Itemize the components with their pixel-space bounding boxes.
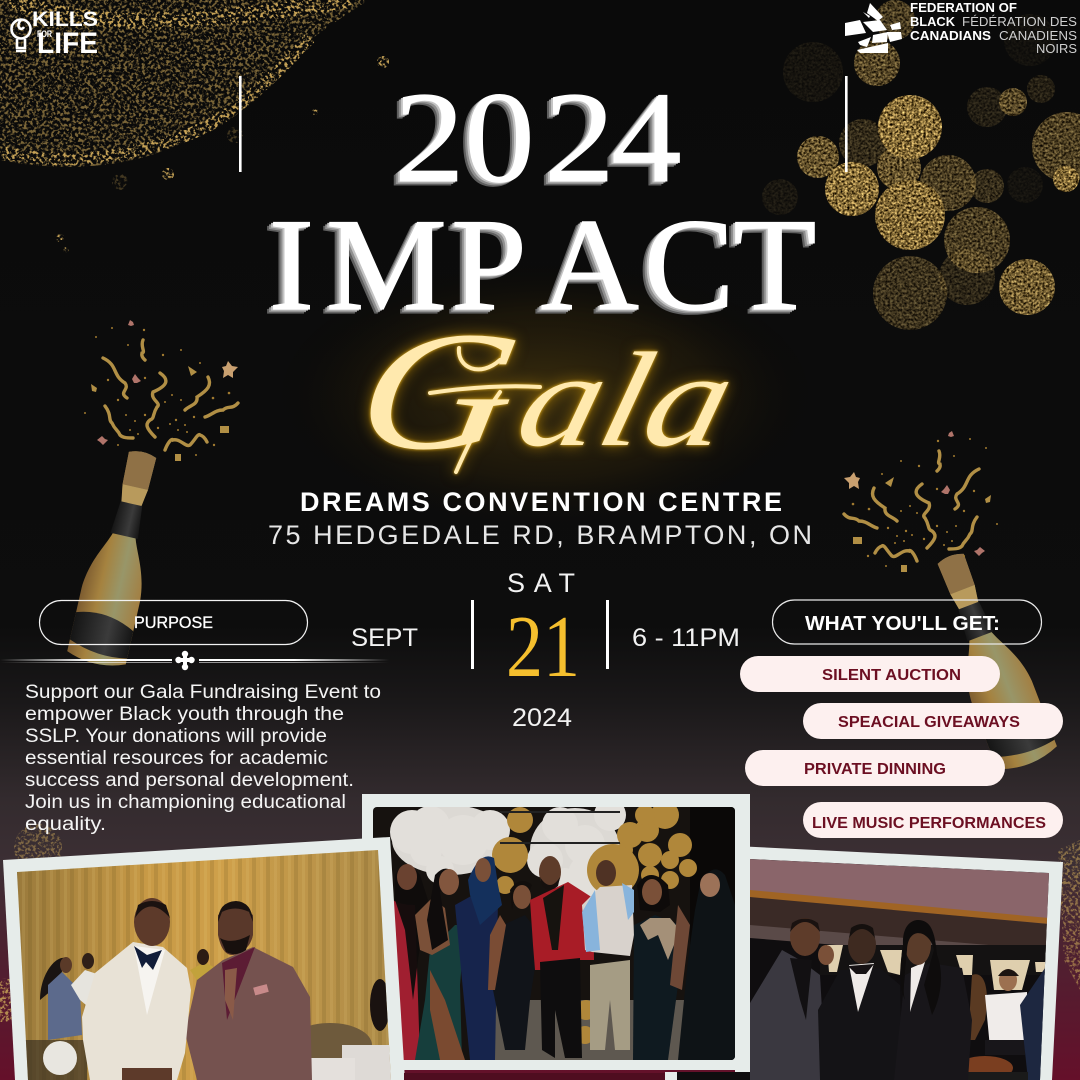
- weekday: SAT: [507, 568, 575, 598]
- date divider right: [606, 600, 609, 669]
- icon: light bulb: [12, 20, 30, 51]
- benefit pill: live music: [803, 802, 1063, 838]
- day number: 21: [506, 599, 580, 696]
- purpose description: SSLP. Your donations will provide: [25, 726, 327, 747]
- time: 6 - 11PM: [632, 624, 740, 652]
- benefit pill: special giveaways: [803, 703, 1063, 739]
- title frame rule left: [239, 76, 242, 172]
- title: IMPACT: IMPACT: [267, 193, 814, 339]
- logo: Federation of Black Canadians: CANADIENS: [999, 28, 1077, 43]
- photo: right group: [665, 846, 1063, 1080]
- logo: Federation of Black Canadians: FEDERATION OF: [910, 0, 1017, 15]
- purpose description: success and personal development.: [25, 770, 354, 791]
- benefit pill: silent auction: [740, 656, 1000, 692]
- left champagne bottle: [66, 445, 172, 670]
- purpose description: Support our Gala Fundraising Event to: [25, 682, 381, 703]
- purpose pill: [40, 600, 308, 644]
- logo: Skills for Life: [12, 8, 98, 60]
- title frame rule right: [845, 76, 848, 172]
- logo: Federation of Black Canadians: FÉDÉRATION DES: [962, 14, 1077, 29]
- title: 2024: 2024: [388, 70, 675, 214]
- purpose description: essential resources for academic: [25, 748, 328, 769]
- benefit pill: live music: LIVE MUSIC PERFORMANCES: [812, 815, 1046, 832]
- month: SEPT: [351, 624, 418, 652]
- logo: Federation of Black Canadians: NOIRS: [1036, 41, 1077, 56]
- purpose description: [25, 682, 381, 835]
- date block: [351, 568, 740, 732]
- woman in black gown: [633, 915, 680, 1060]
- title: Gala neon script: [345, 296, 749, 485]
- ornamental divider: [0, 651, 389, 670]
- benefit pill: special giveaways: SPEACIAL GIVEAWAYS: [838, 714, 1020, 731]
- warm glow behind title: [265, 255, 825, 535]
- title: 2024: 2024: [392, 67, 679, 211]
- purpose description: equality.: [25, 814, 106, 835]
- gold bokeh lights: [762, 0, 1080, 330]
- logo: Federation of Black Canadians: CANADIANS: [910, 28, 991, 43]
- woman in green: [415, 925, 465, 1060]
- what you'll get pill: [772, 600, 1042, 644]
- logo: Skills for Life: LIFE: [37, 27, 98, 60]
- bottom glitter accents: [0, 824, 1080, 1022]
- woman in dark hijab: [678, 869, 735, 1060]
- logo: Federation of Black Canadians: [845, 0, 1077, 56]
- photo: centre group: [362, 794, 750, 1070]
- logo: Federation of Black Canadians: BLACK: [910, 14, 956, 29]
- man in red jacket: [530, 882, 594, 970]
- man in blue shirt: [590, 960, 630, 1050]
- right confetti burst: [844, 431, 998, 572]
- year: 2024: [512, 704, 572, 732]
- title: 2024: 2024: [390, 68, 677, 212]
- title: Gala neon script: G: [345, 296, 532, 485]
- left confetti burst: [84, 320, 238, 461]
- benefit pill: silent auction: SILENT AUCTION: [822, 667, 961, 684]
- purpose description: empower Black youth through the: [25, 704, 344, 725]
- date divider left: [471, 600, 474, 669]
- benefit pill: private dinning: PRIVATE DINNING: [804, 761, 946, 778]
- logo: Skills for Life: KILLS: [32, 8, 98, 31]
- woman in black dress: [493, 916, 534, 1050]
- venue address: 75 HEDGEDALE RD, BRAMPTON, ON: [268, 520, 812, 550]
- woman in blue hijab: [455, 890, 498, 1060]
- woman in red: [393, 900, 420, 1060]
- what you'll get pill: WHAT YOU'LL GET:: [805, 613, 1000, 635]
- title: Gala neon script: ala: [505, 324, 749, 475]
- title: IMPACT: IMPACT: [263, 196, 810, 342]
- venue name: DREAMS CONVENTION CENTRE: [300, 487, 782, 517]
- title: IMPACT: IMPACT: [269, 192, 816, 338]
- title: 2024: 2024: [394, 66, 681, 210]
- icon: maple leaf: [845, 3, 902, 53]
- title: IMPACT: IMPACT: [265, 194, 812, 340]
- benefit pill: private dinning: [745, 750, 1005, 786]
- logo: Skills for Life: FOR: [37, 29, 52, 39]
- gold glitter swirl: [0, 0, 389, 253]
- purpose description: Join us in championing educational: [25, 792, 346, 813]
- maroon strip below centre photo: [404, 1073, 665, 1080]
- photo: left group: [3, 837, 405, 1080]
- right champagne bottle: [920, 545, 1059, 775]
- purpose pill: PURPOSE: [134, 614, 213, 632]
